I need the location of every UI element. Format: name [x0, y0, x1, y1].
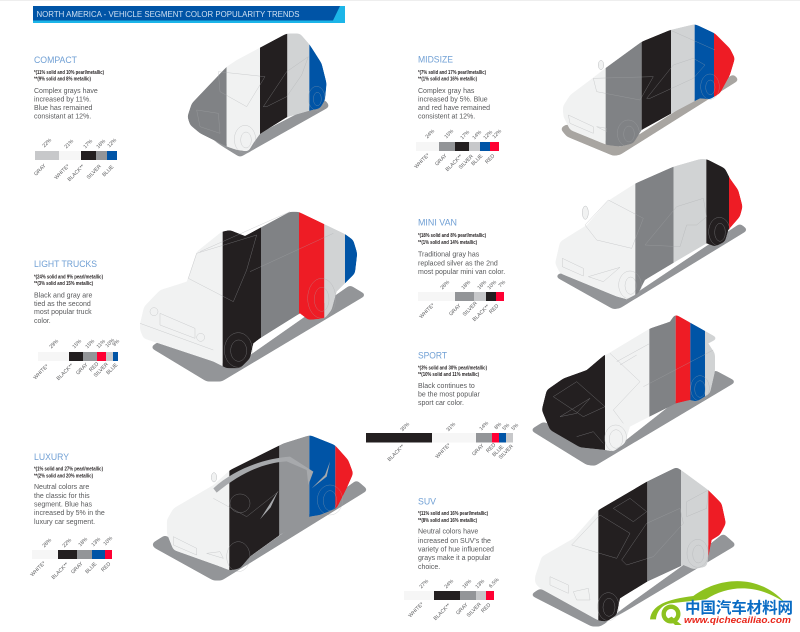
bar chart: sport: 14% — [478, 420, 490, 432]
logo: green car swoosh — [650, 581, 785, 625]
description: light trucks — [34, 292, 92, 325]
footnotes: mini van: *(18% solid and 8% pearl/metallic) — [418, 233, 486, 239]
bar chart: light trucks: 15% — [84, 338, 96, 350]
bar chart: compact: SILVER — [86, 164, 103, 181]
footnotes: sport: **(10% solid and 11% metallic) — [418, 372, 479, 378]
bar chart: compact: BLUE — [101, 164, 116, 178]
bar chart: light trucks: 11% — [96, 338, 107, 350]
bar chart: midsize: 14% — [471, 129, 483, 141]
bar chart: midsize: 15% — [443, 128, 455, 140]
footnotes: luxury: **(2% solid and 20% metallic) — [34, 473, 93, 479]
footnotes: compact — [34, 70, 104, 82]
bar chart: mini van: BLACK** — [472, 304, 491, 323]
bar chart: mini van: 10% — [486, 279, 498, 291]
description: compact: consistant at 12%. — [34, 114, 91, 120]
bar chart: light trucks: 29% — [48, 338, 60, 350]
description: sport — [418, 383, 481, 407]
description: sport: Black continues to — [418, 383, 475, 390]
heading: compact: COMPACT — [34, 55, 77, 65]
bar chart: midsize — [414, 128, 503, 173]
bar chart: sport: GRAY — [471, 443, 486, 457]
description: suv: increased on SUV's the — [418, 538, 491, 545]
footnotes: mini van — [418, 233, 486, 246]
description: sport: be the most popular — [418, 392, 481, 398]
bar chart: suv: 6.5% — [488, 577, 501, 590]
bar chart: light trucks: WHITE* — [33, 364, 50, 381]
heading: midsize: MIDSIZE — [418, 55, 453, 65]
panel: suv — [404, 467, 737, 627]
description: luxury: luxury car segment. — [34, 519, 95, 526]
car: sport — [530, 310, 737, 466]
footnotes: sport: *(3% solid and 30% pearl/metallic) — [418, 365, 487, 371]
footnotes: midsize: **(1% solid and 16% metallic) — [418, 76, 477, 82]
footnotes: light trucks: *(24% solid and 9% pearl/metallic) — [34, 274, 103, 280]
bar chart: mini van: 7% — [498, 279, 507, 289]
bar chart: sport: 8% — [494, 421, 503, 431]
bar chart: compact: 17% — [82, 138, 94, 150]
bar chart: light trucks: GRAY — [75, 362, 90, 376]
description: suv: Neutral colors have — [418, 528, 478, 536]
heading: luxury: LUXURY — [34, 452, 69, 462]
bar chart: luxury: 13% — [90, 536, 102, 548]
description: light trucks: tied as the second — [34, 301, 91, 308]
bar chart: mini van: WHITE* — [419, 303, 436, 320]
panel: mini van — [418, 157, 748, 323]
bar chart: midsize: 17% — [459, 129, 471, 141]
bar chart: suv — [404, 577, 501, 622]
heading: suv: SUV — [418, 497, 436, 507]
description: luxury — [34, 484, 105, 526]
bar chart: midsize: BLUE — [470, 153, 485, 167]
bar chart: light trucks: SILVER — [93, 362, 110, 379]
description: light trucks: most popular truck — [34, 309, 92, 316]
bar chart: luxury: BLUE — [84, 561, 99, 575]
description: luxury: Neutral colors are — [34, 484, 89, 491]
description: mini van: most popular mini van color. — [418, 269, 505, 276]
watermark name: 中国汽车材料网 — [685, 598, 793, 617]
bar chart: midsize: 12% — [482, 129, 494, 141]
footnotes: light trucks — [34, 274, 103, 287]
bar chart: compact: 21% — [63, 138, 75, 150]
heading: mini van: MINI VAN — [418, 218, 457, 228]
bar chart: luxury: RED — [100, 561, 112, 573]
description: compact: increased by 11%. — [34, 96, 91, 104]
bar chart: suv: WHITE* — [408, 602, 425, 619]
title banner: NORTH AMERICA - VEHICLE SEGMENT COLOR POPULARITY TRENDS — [36, 9, 300, 19]
car: midsize — [560, 20, 739, 156]
bar chart: compact: 16% — [95, 138, 107, 150]
bar chart: sport: 31% — [445, 421, 457, 433]
bar chart: mini van: SILVER — [462, 301, 479, 318]
bar chart: mini van: 26% — [439, 279, 451, 291]
panel: sport — [366, 310, 737, 466]
bar chart: light trucks: 9% — [112, 338, 121, 348]
bar chart: midsize: 12% — [491, 128, 503, 140]
bar chart: suv: 27% — [418, 578, 430, 590]
footnotes: midsize — [418, 70, 486, 82]
bar chart: luxury: 18% — [77, 536, 89, 548]
description: midsize: and red have remained — [418, 105, 490, 112]
description: light trucks: color. — [34, 318, 51, 325]
car: light truck — [137, 210, 367, 382]
description: suv: grays make it a popular — [418, 555, 491, 562]
bar chart: mini van: 16% — [476, 279, 488, 291]
footnotes: compact: **(9% solid and 8% metallic) — [34, 76, 91, 82]
panel: luxury — [30, 430, 368, 581]
panel: light trucks — [33, 210, 367, 382]
bar chart: midsize: WHITE* — [414, 153, 431, 170]
bar chart: light trucks — [33, 337, 121, 382]
footnotes: suv — [418, 511, 488, 524]
footnotes: midsize: *(7% solid and 17% pearl/metallic) — [418, 70, 486, 76]
bar chart: suv: SILVER — [466, 602, 483, 619]
bar chart: midsize: RED — [484, 153, 496, 165]
description: suv — [418, 528, 494, 571]
bar chart: sport: 5% — [502, 422, 511, 432]
description: midsize — [418, 88, 490, 120]
description: midsize: increased by 5%. Blue — [418, 96, 488, 104]
title banner — [33, 6, 345, 23]
footnotes: sport — [418, 365, 487, 378]
footnotes: light trucks: **(3% solid and 15% metallic) — [34, 281, 93, 287]
bar chart: suv: 13% — [474, 578, 486, 590]
panel: compact — [33, 30, 333, 183]
bar chart: mini van: GRAY — [448, 303, 463, 317]
bar chart: light trucks: BLUE — [105, 362, 120, 376]
bar chart: mini van — [418, 279, 507, 323]
description: luxury: increased by 5% in the — [34, 510, 105, 517]
car: luxury — [152, 430, 368, 581]
description: suv: choice. — [418, 564, 440, 571]
bar chart: compact: 22% — [41, 137, 53, 149]
description: compact: Blue has remained — [34, 105, 92, 112]
bar chart: suv: 24% — [443, 578, 455, 590]
bar chart: suv: GRAY — [455, 602, 470, 616]
description: mini van: replaced silver as the 2nd — [418, 260, 498, 268]
bar chart: luxury: 10% — [102, 535, 114, 547]
bar chart: sport: BLACK** — [387, 444, 406, 463]
description: compact — [34, 88, 98, 120]
car: suv — [530, 467, 737, 627]
footnotes: compact: *(11% solid and 10% pearl/metallic) — [34, 70, 104, 76]
description: light trucks: Black and gray are — [34, 292, 92, 300]
description: luxury: segment. Blue has — [34, 502, 92, 508]
bar chart: mini van: 18% — [460, 279, 472, 291]
description: mini van — [418, 252, 505, 276]
bar chart: sport: 5% — [511, 422, 520, 432]
bar chart: luxury: GRAY — [70, 561, 85, 575]
panel: midsize — [414, 20, 739, 173]
bar chart: midsize: SILVER — [458, 154, 475, 171]
bar chart: light trucks: RED — [88, 361, 100, 373]
bar chart: sport: WHITE* — [435, 443, 452, 460]
heading: sport: SPORT — [418, 350, 447, 360]
bar chart: suv: RED — [480, 602, 492, 614]
car: compact — [183, 30, 333, 157]
footnotes: suv: *(11% solid and 16% pearl/metallic) — [418, 511, 488, 517]
bar chart: sport: RED — [485, 442, 497, 454]
bar chart: light trucks: 15% — [71, 338, 83, 350]
description: midsize: consistent at 12%. — [418, 114, 475, 120]
bar chart: luxury: BLACK** — [51, 562, 70, 581]
bar chart: light trucks: 10% — [104, 337, 116, 349]
footnotes: luxury — [34, 466, 103, 479]
bar chart: compact — [33, 137, 118, 183]
bar chart: luxury — [30, 535, 114, 581]
bar chart: luxury: 22% — [61, 537, 73, 549]
bar chart: suv: 16% — [461, 578, 473, 590]
bar chart: mini van: RED — [488, 303, 500, 315]
bar chart: compact: WHITE* — [54, 164, 71, 181]
bar chart: sport: 35% — [399, 421, 411, 433]
description: mini van: Traditional gray has — [418, 252, 480, 258]
description: suv: variety of hue influenced — [418, 546, 494, 554]
bar chart: sport: SILVER — [498, 444, 515, 461]
watermark logo — [650, 581, 793, 626]
description: sport: sport car color. — [418, 400, 464, 407]
bar chart: luxury: WHITE* — [30, 561, 47, 578]
footnotes: luxury: *(1% solid and 27% pearl/metallic) — [34, 466, 103, 472]
description: luxury: the classic for this — [34, 493, 90, 500]
bar chart: sport — [366, 420, 520, 463]
bar chart: luxury: 26% — [41, 537, 53, 549]
bar chart: compact: GRAY — [33, 163, 48, 177]
bar chart: midsize: GRAY — [434, 153, 449, 167]
bar chart: compact: 12% — [106, 137, 118, 149]
car: mini van — [553, 157, 748, 309]
heading: light trucks: LIGHT TRUCKS — [34, 259, 97, 269]
bar chart: compact: BLACK** — [67, 164, 86, 183]
bar chart: suv: BLACK** — [433, 603, 452, 622]
bar chart: sport: BLUE — [491, 444, 506, 458]
watermark url: www.qichecailiao.com — [684, 615, 791, 626]
bar chart: midsize: 24% — [424, 128, 436, 140]
bar chart: midsize: BLACK** — [445, 154, 464, 173]
description: midsize: Complex gray has — [418, 88, 475, 95]
bar chart: light trucks: BLACK** — [56, 363, 75, 382]
description: compact: Complex grays have — [34, 88, 98, 95]
footnotes: mini van: **(1% solid and 14% metallic) — [418, 240, 477, 246]
footnotes: suv: **(8% solid and 16% metallic) — [418, 518, 477, 524]
